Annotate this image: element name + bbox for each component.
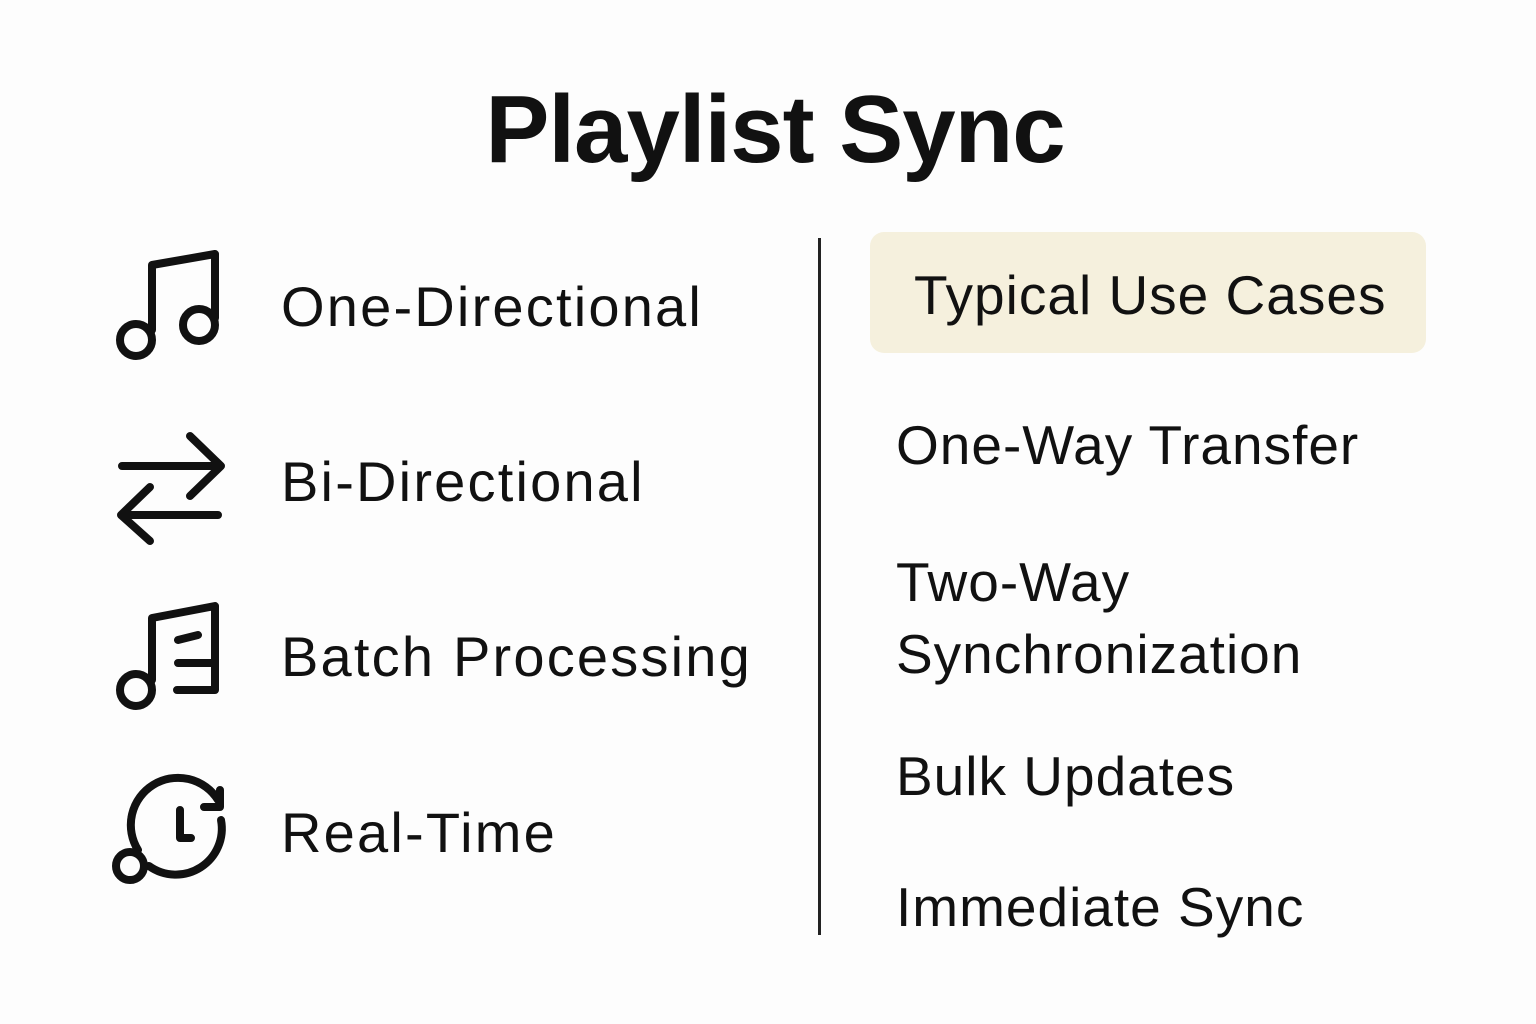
text: two-way synchronization: Two-Way [896,551,1130,613]
text: immediate sync: Immediate Sync [896,876,1304,938]
icon: batch note [116,602,219,710]
icon: real-time clock [112,774,226,884]
text: one-directional: One-Directional [281,275,703,338]
heading box: typical use cases: Typical Use Cases [914,264,1386,326]
heading box: typical use cases [870,232,1426,353]
text: bi-directional: Bi-Directional [281,450,645,513]
icon: music note [116,250,219,360]
icon: bi-directional arrows [117,432,225,545]
title: Playlist Sync [485,76,1065,183]
text: batch processing: Batch Processing [281,625,752,688]
panel: use cases [870,232,1426,938]
text: two-way synchronization: Synchronization [896,623,1302,685]
text: one-way transfer: One-Way Transfer [896,414,1359,476]
text: bulk updates: Bulk Updates [896,745,1235,807]
text: two-way synchronization [896,551,1302,685]
panel: sync types [112,250,752,884]
text: real-time: Real-Time [281,801,557,864]
